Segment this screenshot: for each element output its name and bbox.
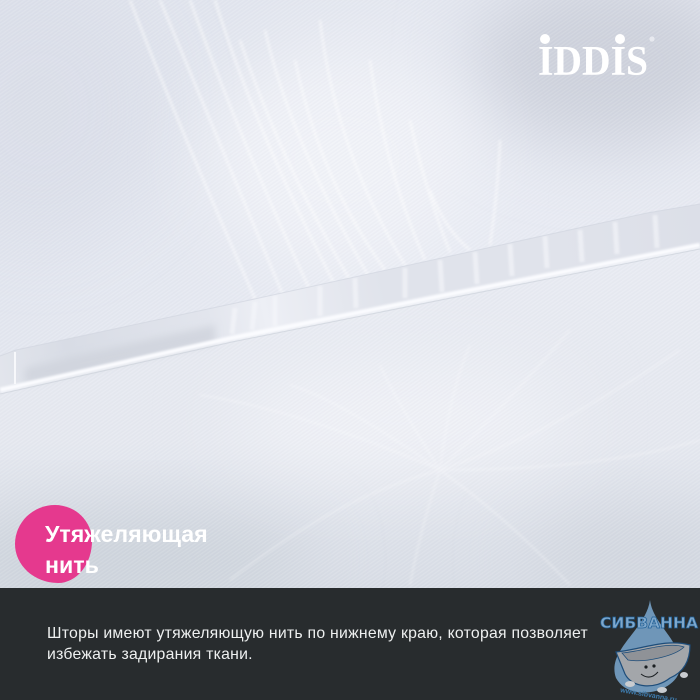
hem darker shade <box>25 325 215 384</box>
weighted hem seam <box>0 204 700 394</box>
bath face <box>641 664 658 677</box>
heading: Утяжеляющая нить: Утяжеляющая <box>45 521 208 547</box>
seam stitch <box>0 245 700 390</box>
description text: Шторы имеют утяжеляющую нить по нижнему краю, которая позволяет <box>47 625 588 642</box>
pink circle accent <box>15 505 92 583</box>
watermark logo: СИБВАННА <box>600 600 698 700</box>
heading: Утяжеляющая нить: нить <box>45 552 99 578</box>
logo: IDDIS: IDDIS <box>538 39 648 85</box>
brand name: СИБВАННА <box>600 614 698 632</box>
description text: избежать задирания ткани. <box>47 646 253 663</box>
bath feet <box>625 672 688 693</box>
bathtub <box>616 643 690 686</box>
dark footer band <box>0 588 700 700</box>
feather pattern upper <box>130 0 500 310</box>
description text <box>47 625 588 663</box>
heading: Утяжеляющая нить <box>45 521 208 578</box>
feather pattern lower <box>200 330 700 585</box>
water drop <box>614 600 680 693</box>
